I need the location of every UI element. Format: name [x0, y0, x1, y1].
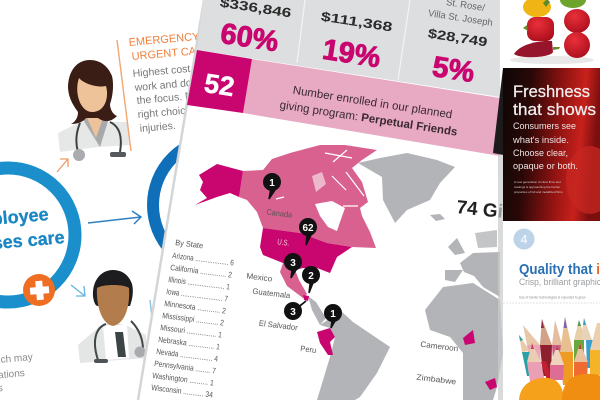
column 2 figures: 19% — [320, 34, 383, 74]
heading: freshness that shows: that shows — [513, 101, 596, 119]
text block: consumers: Consumers see — [513, 121, 576, 131]
total: 74 gifts: 74 Gifts — [455, 197, 527, 225]
panel: care pathway — [0, 31, 287, 394]
list: donors by state: Iowa ........................ 7 — [166, 287, 229, 304]
fine print — [514, 180, 564, 194]
list: donors by state: Illinois ..................... 1 — [168, 275, 231, 292]
icon: step number 4: 4 — [521, 232, 528, 246]
map pins: 62 — [302, 223, 314, 234]
arrow: to male doctor — [71, 285, 85, 296]
brochure sheet — [503, 0, 600, 400]
arrow fragment — [150, 300, 152, 318]
country labels: Canada — [266, 207, 293, 220]
icon: step number 4 — [514, 228, 534, 250]
icon: male doctor — [78, 270, 147, 363]
country labels: El Salvador — [258, 319, 299, 332]
arrow: to second ring — [88, 211, 141, 224]
text block: consumers: opaque or both. — [513, 161, 578, 171]
page edge shadow — [138, 0, 204, 400]
employee care ring — [0, 168, 75, 302]
map pins: 1 — [330, 309, 336, 320]
list: donors by state: Pennsylvania ........ 7 — [154, 359, 217, 376]
map: world donors — [195, 145, 527, 400]
image: stacked peppers — [510, 0, 594, 64]
icon: orange plus badge — [23, 274, 55, 306]
country labels: Zimbabwe — [416, 373, 457, 386]
text block: consumers: Choose clear, — [513, 148, 568, 158]
panel: annual report page — [138, 0, 527, 400]
fine print: coatings is approaching the barrier — [514, 185, 560, 189]
list: donors by state: California .............. 2 — [170, 263, 233, 280]
Hudson Bay and arctic channels — [276, 150, 364, 231]
map pins: 2 — [308, 271, 314, 282]
country labels — [246, 207, 459, 386]
icon: female doctor — [58, 60, 129, 161]
country labels: Mexico — [246, 271, 273, 284]
magenta countries — [195, 164, 497, 390]
table: giving by campus — [197, 0, 500, 97]
text block: emergency description — [132, 63, 193, 135]
map pins — [263, 173, 342, 328]
text block: consumers — [512, 121, 578, 171]
heading: quality that: Quality that i — [519, 261, 600, 278]
divider: orange rule — [117, 40, 131, 151]
list: donors by state: Minnesota ............ 2 — [164, 299, 227, 316]
heading: emergency urgent care — [128, 31, 212, 63]
map pins: 3 — [290, 258, 296, 269]
second care ring — [153, 138, 287, 272]
dark sliver behind page — [493, 68, 503, 155]
list: donors by state: Nevada .................. 4 — [156, 347, 219, 364]
list: donors by state: Arizona ................... 6 — [172, 251, 235, 268]
panel: packaging brochure — [503, 0, 600, 400]
fine print: A new generation of clear films and — [514, 180, 561, 184]
country labels: Cameroon — [420, 340, 459, 353]
text block: emergency description: right choice — [137, 104, 192, 121]
column 1 figures: 60% — [218, 18, 281, 58]
light pink: Canada and Mexico — [239, 145, 377, 298]
column 3 figures — [427, 0, 493, 89]
oranges — [519, 378, 564, 400]
map pins: 1 — [269, 178, 275, 189]
column 3 figures: Villa St. Joseph — [427, 8, 493, 29]
list: donors by state — [151, 238, 235, 400]
page sheet — [138, 0, 503, 400]
callout text: giving program: Perpetual Friends — [279, 99, 458, 139]
country labels: U.S. — [277, 237, 290, 248]
text block: consumers: what's inside. — [512, 135, 569, 145]
heading: freshness that shows: Freshness — [513, 83, 590, 101]
column 2 figures: $111,368 — [320, 9, 393, 34]
callout: planned giving — [187, 50, 500, 156]
page fold shadow — [498, 155, 503, 400]
column 1 figures — [218, 0, 292, 58]
heading: emergency urgent care: EMERGENCY — [128, 31, 201, 49]
list: donors by state: Mississippi ............ 2 — [162, 311, 225, 328]
text block: bottom note — [0, 352, 33, 394]
list: donors by state: Nebraska .............. 1 — [158, 335, 221, 352]
list: donors by state: Washington .......... 1 — [152, 371, 215, 388]
callout text: Number enrolled in our planned — [292, 85, 453, 121]
heading: freshness that shows — [513, 83, 596, 119]
back row pencils — [523, 317, 600, 385]
dashed rule — [503, 302, 600, 304]
image panel: freshness — [503, 68, 600, 221]
front row pencils — [519, 335, 588, 382]
text block: emergency description: work and do — [133, 77, 192, 94]
heading: employee chooses care — [0, 204, 65, 257]
country labels: Peru — [300, 344, 317, 355]
country labels: Guatemala — [252, 287, 291, 300]
list: donors by state: Missouri ................ 1 — [160, 323, 223, 340]
arrow: to female doctor — [57, 159, 68, 172]
text block: emergency description: the focus. N — [136, 90, 193, 107]
heading: emergency urgent care: URGENT CARE — [131, 44, 212, 63]
text block: emergency description: injuries. — [139, 120, 176, 135]
fine print: Use of barrier technologies is expected to grow — [519, 296, 586, 300]
column 3 figures: 5% — [430, 51, 477, 89]
column 3 figures: $28,749 — [427, 26, 488, 50]
map pins: 3 — [290, 307, 296, 318]
image: pencils and oranges — [519, 317, 600, 400]
fine print: properties of foil and metallized films. — [514, 190, 564, 194]
column 2 figures — [320, 9, 393, 74]
gray land — [308, 153, 503, 400]
text block: emergency description: Highest cost — [132, 63, 191, 80]
callout number: 52 — [202, 68, 237, 102]
list: donors by state: By State — [175, 238, 204, 250]
